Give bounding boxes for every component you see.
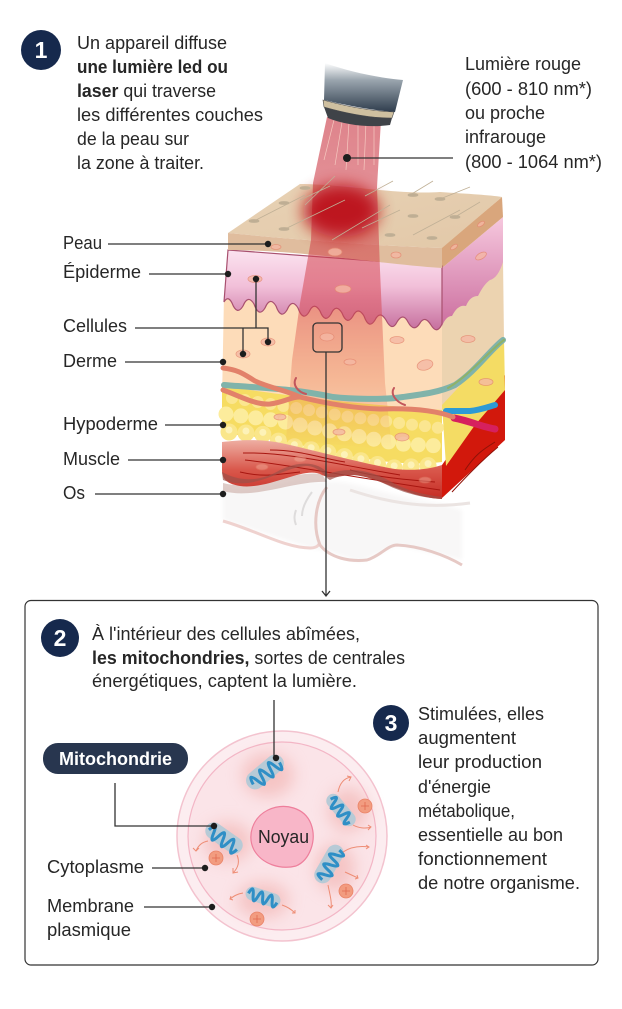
zoom box and arrow [313, 323, 342, 596]
skin labels: Os [63, 483, 85, 503]
step 3 text: leur production [418, 752, 542, 772]
mitochondrie label: Mitochondrie [59, 749, 172, 769]
side face [442, 197, 505, 498]
light label: infrarouge [465, 127, 546, 147]
step 1 text: une lumière led ou [77, 57, 228, 77]
step 2 text: À l'intérieur des cellules abîmées, [92, 624, 360, 644]
leader lines [115, 700, 279, 910]
step 1 badge [21, 30, 61, 70]
skin labels: Peau [63, 233, 102, 253]
light beam [286, 117, 392, 450]
muscle [222, 440, 442, 499]
cell diagram [177, 731, 387, 941]
skin labels: Muscle [63, 449, 120, 469]
light label: (600 - 810 nm*) [465, 79, 592, 99]
epidermis [224, 250, 442, 330]
step 1 text: laser qui traverse [77, 81, 216, 101]
skin labels: Épiderme [63, 262, 141, 282]
light label: ou proche [465, 103, 545, 123]
step 3 badge: 3 [385, 710, 397, 736]
dermis [222, 295, 442, 420]
panel: cell detail [25, 600, 598, 965]
nucleus [251, 806, 313, 867]
energy particles [209, 799, 372, 926]
mitochondria [242, 751, 288, 793]
bone [223, 474, 470, 565]
step 1 text: de la peau sur [77, 129, 189, 149]
top face [228, 184, 502, 248]
mitochondrie label [43, 743, 188, 774]
device [323, 63, 403, 126]
label lines [95, 154, 453, 497]
step 2 text [92, 624, 405, 691]
skin labels: Derme [63, 351, 117, 371]
step 3 text: fonctionnement [418, 849, 547, 869]
step 1 text: les différentes couches [77, 105, 263, 125]
light label [465, 54, 602, 172]
step 3 text [418, 704, 580, 893]
step 2 text: les mitochondries, sortes de centrales [92, 648, 405, 668]
step 3 badge [373, 705, 409, 741]
step 3 text: de notre organisme. [418, 873, 580, 893]
step 1 text: la zone à traiter. [77, 153, 204, 173]
step 2 badge: 2 [54, 625, 66, 651]
fat layer [222, 386, 442, 468]
cell labels [47, 857, 144, 940]
step 1 text [77, 33, 263, 173]
step 2 badge [41, 619, 79, 657]
light label: (800 - 1064 nm*) [465, 152, 602, 172]
light label: Lumière rouge [465, 54, 581, 74]
step 3 text: métabolique, [418, 801, 515, 821]
step 3 text: d'énergie [418, 777, 491, 797]
skin cross-section [222, 117, 505, 565]
peau band [228, 233, 442, 268]
step 3 text: essentielle au bon [418, 825, 563, 845]
blood vessels [223, 340, 504, 429]
hairs and follicles [249, 176, 480, 240]
cell labels: Membrane [47, 896, 134, 916]
step 3 text: Stimulées, elles [418, 704, 544, 724]
skin labels: Cellules [63, 316, 127, 336]
skin labels [63, 233, 158, 503]
step 1 text: Un appareil diffuse [77, 33, 227, 53]
cells [236, 220, 493, 483]
cell labels: Cytoplasme [47, 857, 144, 877]
step 2 text: énergétiques, captent la lumière. [92, 671, 357, 691]
skin labels: Hypoderme [63, 414, 158, 434]
energy arrows [193, 776, 371, 913]
step 3 text: augmentent [418, 728, 516, 748]
step 1 badge: 1 [35, 37, 48, 63]
nucleus: Noyau [258, 827, 309, 847]
cell labels: plasmique [47, 920, 131, 940]
